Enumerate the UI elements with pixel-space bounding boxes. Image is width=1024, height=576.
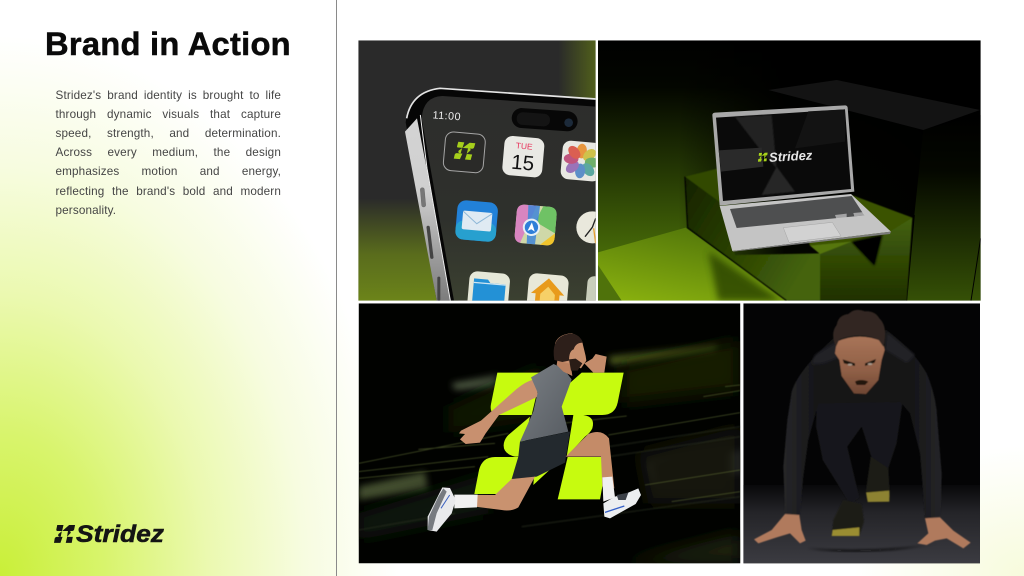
panel: phone mockup bbox=[358, 40, 608, 315]
text block: brand description: reflecting the brand's bold and modern bbox=[56, 185, 281, 198]
app icon: mail bbox=[455, 200, 499, 242]
app icon: clock bbox=[576, 211, 596, 244]
app icon: Stridez bbox=[443, 131, 486, 173]
panel: laptop mockup bbox=[598, 40, 981, 301]
app icon: home bbox=[527, 273, 569, 301]
app icon: calendar: TUE bbox=[516, 140, 533, 152]
text block: brand description: speed, strength, and determination. bbox=[56, 127, 281, 140]
laptop screen logo bbox=[758, 150, 812, 162]
panel: runner photo bbox=[359, 303, 740, 563]
motion streaks bbox=[359, 340, 740, 563]
brand mark bbox=[474, 373, 624, 499]
app icon: files bbox=[468, 271, 510, 301]
slab upper bbox=[768, 80, 980, 130]
panel: crouching athlete photo bbox=[743, 303, 980, 563]
text block: brand description: Across every medium, the design bbox=[56, 146, 281, 159]
app icon: calendar: 15 bbox=[510, 151, 535, 176]
laptop screen logo: Stridez bbox=[769, 148, 813, 165]
app icon: calendar bbox=[502, 135, 545, 178]
logo: Stridez bbox=[54, 521, 164, 548]
clock text: 11:00 bbox=[432, 109, 461, 123]
text block: brand description: emphasizes motion and energy, bbox=[56, 165, 281, 178]
block right bbox=[907, 115, 981, 301]
logo wordmark: Stridez bbox=[76, 521, 164, 548]
title: Brand in Action bbox=[45, 25, 291, 62]
app icon: maps bbox=[514, 204, 557, 246]
app icon: photos bbox=[560, 140, 596, 182]
athlete bbox=[754, 310, 971, 548]
text block: brand description: personality. bbox=[56, 204, 116, 217]
text block: brand description: Stridez's brand identity is brought to life bbox=[56, 88, 281, 102]
app icon: partial bbox=[586, 276, 596, 300]
text block: brand description bbox=[56, 88, 281, 217]
centre block bbox=[685, 168, 912, 301]
phone body bbox=[405, 88, 596, 301]
dynamic island bbox=[511, 107, 578, 132]
floor step left bbox=[598, 228, 788, 301]
logo mark bbox=[54, 525, 75, 543]
runner bbox=[428, 333, 641, 532]
laptop bbox=[712, 105, 891, 252]
floor bbox=[743, 485, 980, 563]
text block: brand description: through dynamic visuals that capture bbox=[56, 108, 281, 121]
